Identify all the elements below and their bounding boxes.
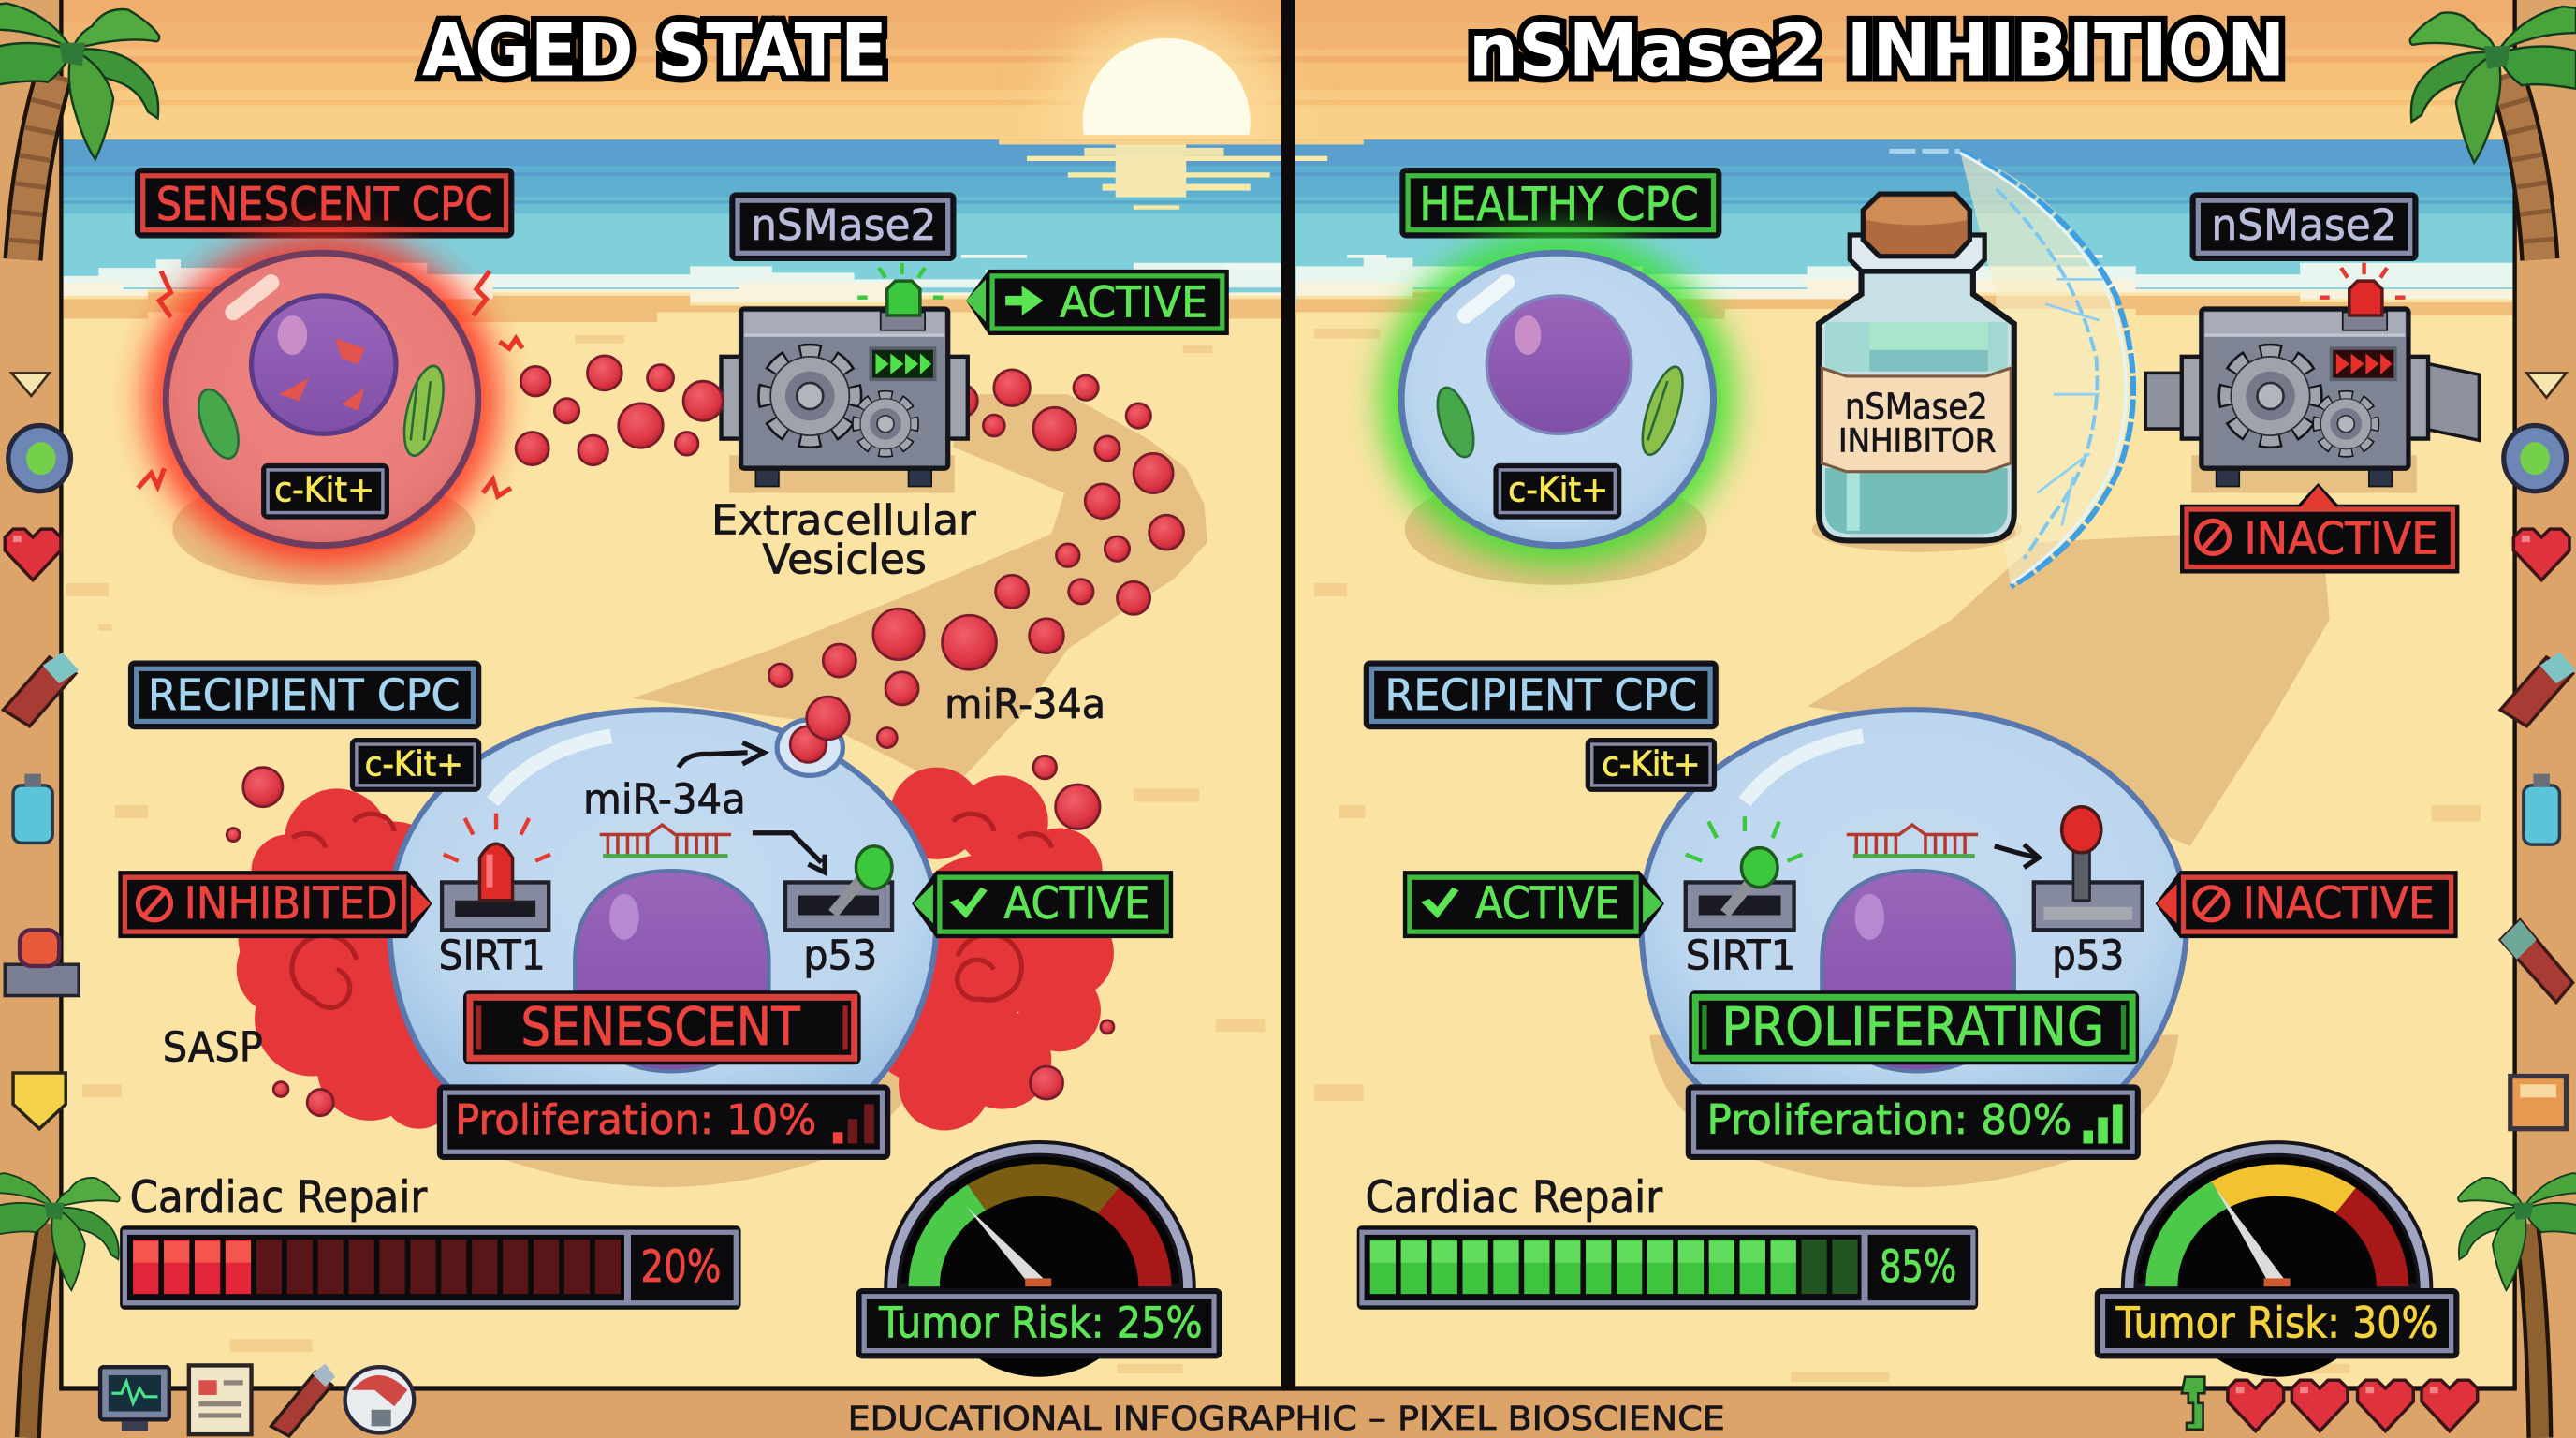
recipient cell right <box>1641 710 2187 1104</box>
label: c-Kit+ recipient left: c-Kit+ <box>365 743 463 784</box>
label: extracellular vesicles: Vesicles <box>762 536 927 584</box>
SASP cloud left <box>237 788 460 1129</box>
footer text: EDUCATIONAL INFOGRAPHIC – PIXEL BIOSCIENCE <box>848 1400 1725 1438</box>
sea <box>61 139 2513 309</box>
label: cardiac repair right: Cardiac Repair <box>1365 1172 1663 1224</box>
label: p53 left: p53 <box>803 932 877 979</box>
nucleus <box>575 871 768 1071</box>
banner: senescent <box>463 990 861 1064</box>
panel: proliferation 10% <box>439 1086 889 1158</box>
label: recipient cpc right: RECIPIENT CPC <box>1385 670 1697 720</box>
label: recipient cpc right <box>1365 662 1717 727</box>
label: recipient cpc left: RECIPIENT CPC <box>148 670 460 720</box>
title: nSMase2 inhibition: nSMase2 INHIBITION <box>1469 9 2285 94</box>
label: extracellular vesicles: Extracellular <box>711 496 977 544</box>
sun halo <box>1048 17 1284 213</box>
switch: SIRT1 inhibited <box>442 814 550 930</box>
label: active SIRT1: ACTIVE <box>1475 878 1620 930</box>
sand texture patches <box>66 329 2481 1382</box>
sun <box>1083 38 1251 135</box>
inhibitor bottle <box>1819 194 2016 552</box>
label: miR-34a outside: miR-34a <box>944 681 1105 728</box>
bottom right icons: hearts and small figure <box>2182 1377 2478 1431</box>
label: inactive p53 <box>2156 871 2458 938</box>
banner: senescent: SENESCENT <box>520 997 800 1058</box>
label: senescent cpc: SENESCENT CPC <box>156 177 493 231</box>
label: inactive p53: INACTIVE <box>2243 878 2435 930</box>
label: inhibited: INHIBITED <box>184 878 398 930</box>
label: recipient cpc left <box>130 662 479 727</box>
senescent cell <box>138 231 522 566</box>
panel: tumor risk 30%: Tumor Risk: 30% <box>2115 1299 2438 1348</box>
label: c-Kit+ senescent <box>263 465 388 518</box>
shaded path: right blocked trail <box>1808 527 2330 846</box>
nucleus <box>1486 296 1632 433</box>
mitochondria <box>191 362 451 463</box>
panel: tumor risk 25% <box>857 1290 1221 1357</box>
miR duplex icon left <box>600 825 731 856</box>
SASP cloud right <box>862 768 1114 1130</box>
label: inhibited <box>118 871 432 938</box>
stress sparks <box>138 271 522 496</box>
palm tree: top left <box>0 4 159 259</box>
bar: cardiac repair 85%: 85% <box>1880 1241 1956 1293</box>
palm tree: bottom left <box>0 1173 120 1438</box>
label: nSMase2 left <box>731 194 955 259</box>
label: extracellular vesicles <box>711 496 977 584</box>
beach sand <box>61 289 2513 1388</box>
label: active machine <box>966 270 1229 335</box>
panel: tumor risk 25%: Tumor Risk: 25% <box>878 1299 1203 1348</box>
energy shield arc <box>1889 151 2138 587</box>
label: c-Kit+ recipient left <box>352 740 479 790</box>
label: active SIRT1 <box>1403 871 1664 938</box>
right side icons <box>2500 373 2576 1129</box>
label: inactive machine <box>2180 483 2459 574</box>
SASP droplets <box>227 756 1114 1116</box>
center divider <box>1281 0 1295 1390</box>
bottle label text: INHIBITOR <box>1838 422 1996 461</box>
vesicles stream <box>516 356 1184 705</box>
cork <box>1863 194 1969 257</box>
gauge: tumor risk 30% <box>2130 1149 2425 1377</box>
label: cardiac repair left: Cardiac Repair <box>130 1172 428 1224</box>
panel: tumor risk 30% <box>2097 1290 2458 1357</box>
label: SIRT1 right: SIRT1 <box>1686 932 1795 979</box>
panel: proliferation 80% <box>1687 1086 2139 1158</box>
bar: cardiac repair 20%: 20% <box>640 1241 721 1293</box>
bar: cardiac repair 85% <box>1357 1225 1978 1310</box>
switch: p53 inactive <box>2034 807 2143 930</box>
label: p53 right: p53 <box>2052 932 2124 979</box>
arrow: to p53 <box>753 833 825 873</box>
label: c-Kit+ recipient right: c-Kit+ <box>1602 743 1701 784</box>
miR duplex icon right <box>1847 825 1978 856</box>
label: healthy cpc: HEALTHY CPC <box>1419 177 1699 231</box>
bottle label text: nSMase2 <box>1845 387 1988 429</box>
label: nSMase2 left: nSMase2 <box>751 200 936 250</box>
left side icons <box>4 373 79 1129</box>
bottle label text <box>1838 387 1996 461</box>
banner: proliferating: PROLIFERATING <box>1721 997 2104 1058</box>
label: c-Kit+ recipient right <box>1587 740 1715 790</box>
machine: active <box>721 263 977 486</box>
palm tree: top right <box>2410 7 2576 259</box>
bar: cardiac repair 20% <box>120 1225 741 1310</box>
label: active p53: ACTIVE <box>1003 878 1150 930</box>
arrow: blocked to p53 <box>1995 844 2039 868</box>
title: aged state: AGED STATE <box>422 9 887 94</box>
label: c-Kit+ healthy <box>1495 465 1620 518</box>
label: inactive machine: INACTIVE <box>2244 513 2438 565</box>
label: c-Kit+ healthy: c-Kit+ <box>1508 469 1608 509</box>
label: active machine: ACTIVE <box>1060 278 1208 328</box>
label: active p53 <box>912 871 1173 938</box>
label: nSMase2 right <box>2191 194 2417 259</box>
label: miR-34a inside: miR-34a <box>583 776 746 824</box>
nucleus with damage <box>252 296 396 433</box>
recipient cell left <box>389 710 936 1104</box>
switch: SIRT1 active <box>1686 816 1802 930</box>
gauge: tumor risk 25% <box>892 1149 1188 1377</box>
palm tree: bottom right <box>2458 1173 2576 1438</box>
healthy cell <box>1380 231 1734 566</box>
label: SIRT1 left: SIRT1 <box>439 932 546 979</box>
mitochondria <box>1430 362 1690 462</box>
label: SASP: SASP <box>163 1024 263 1072</box>
arrow: into cell <box>679 742 764 768</box>
switch: p53 active <box>785 846 892 930</box>
panel: proliferation 80%: Proliferation: 80% <box>1707 1096 2071 1144</box>
cell shadows <box>172 455 2417 1187</box>
machine: inactive with pipes <box>2145 263 2479 486</box>
bottom left icons: monitor, scroll, syringe, orb <box>100 1364 414 1436</box>
shaded path: left vesicle trail <box>633 394 1208 788</box>
membrane uptake vesicle <box>777 697 897 775</box>
wet sand shore <box>61 292 2513 322</box>
label: nSMase2 right: nSMase2 <box>2211 200 2397 250</box>
panel: proliferation 10%: Proliferation: 10% <box>455 1096 816 1144</box>
label: c-Kit+ senescent: c-Kit+ <box>274 469 374 509</box>
sky with sunset bands <box>61 0 2513 144</box>
nucleus <box>1822 871 2014 1071</box>
